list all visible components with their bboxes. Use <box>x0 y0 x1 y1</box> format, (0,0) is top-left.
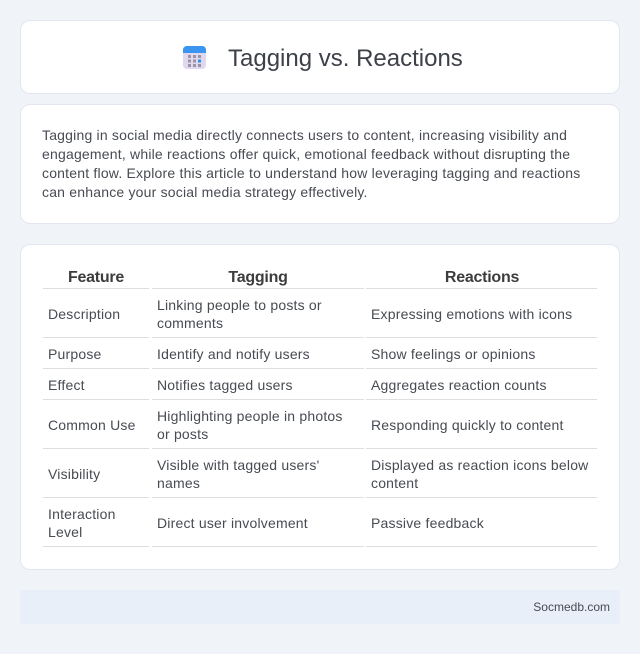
row: Interaction Level: Direct user involvement <box>157 515 308 531</box>
row: Description: comments <box>157 315 223 331</box>
row: Interaction Level <box>48 506 484 540</box>
row: Visibility: Visibility <box>48 466 100 482</box>
footer bar <box>20 590 620 624</box>
row: Visibility <box>48 457 588 491</box>
row: Effect: Notifies tagged users <box>157 377 293 393</box>
text block: introduction: can enhance your social media strategy effectively. <box>42 184 368 200</box>
row: Common Use: Common Use <box>48 417 136 433</box>
row: Visibility: Displayed as reaction icons below <box>371 457 588 473</box>
row: Purpose: Purpose <box>48 346 102 362</box>
row: Effect <box>48 377 547 393</box>
table header: Tagging <box>228 269 288 286</box>
text block: introduction: content flow. Explore this article to understand how leveraging tagging and reactions <box>42 165 580 181</box>
row: Description <box>48 297 572 331</box>
text block: introduction: Tagging in social media directly connects users to content, increasing visibility and <box>42 127 567 143</box>
icon: calendar <box>183 46 206 69</box>
row: Common Use: Highlighting people in photos <box>157 408 343 424</box>
footer text: Socmedb.com <box>533 600 610 614</box>
row: Description: Description <box>48 306 120 322</box>
text block: introduction <box>42 127 580 200</box>
row: Interaction Level: Level <box>48 524 82 540</box>
row: Interaction Level: Passive feedback <box>371 515 484 531</box>
table header <box>68 269 519 286</box>
panel: comparison table <box>20 244 620 570</box>
table header: Feature <box>68 269 124 286</box>
row: Visibility: Visible with tagged users' <box>157 457 319 473</box>
row: Description: Linking people to posts or <box>157 297 322 313</box>
row: Purpose: Identify and notify users <box>157 346 310 362</box>
panel: introduction <box>20 104 620 224</box>
row: Common Use: or posts <box>157 426 208 442</box>
text block: introduction: engagement, while reactions offer quick, emotional feedback without disrupting the <box>42 146 570 162</box>
panel: title card <box>20 20 620 94</box>
row: Visibility: names <box>157 475 200 491</box>
row: Common Use: Responding quickly to content <box>371 417 564 433</box>
row: Effect: Aggregates reaction counts <box>371 377 547 393</box>
row: Visibility: content <box>371 475 418 491</box>
row: Interaction Level: Interaction <box>48 506 116 522</box>
table header: Reactions <box>445 269 519 286</box>
row: Purpose <box>48 346 536 362</box>
row: Common Use <box>48 408 564 442</box>
row: Description: Expressing emotions with icons <box>371 306 572 322</box>
row: Purpose: Show feelings or opinions <box>371 346 536 362</box>
title: Tagging vs. Reactions <box>228 45 463 72</box>
row: Effect: Effect <box>48 377 85 393</box>
